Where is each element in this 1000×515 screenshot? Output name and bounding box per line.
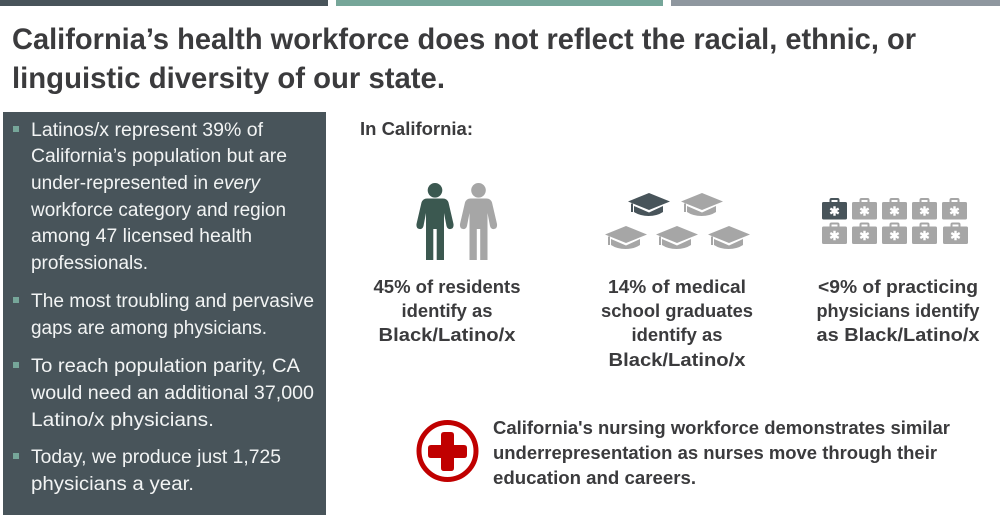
stat: medical school graduates: [601, 277, 753, 370]
bullet point: Latino representation: among 47 licensed health: [31, 226, 252, 247]
stat: practicing physicians: <9% of practicing: [818, 277, 978, 297]
bullet point: annual production: Today, we produce just 1,725: [31, 447, 281, 468]
bullet point: physician gaps: [13, 291, 314, 339]
callout: nursing workforce: [493, 418, 950, 488]
stat: residents: identify as: [402, 301, 492, 321]
bullet point: Latino representation: California’s population but are: [31, 146, 287, 167]
bullet point: Latino representation: professionals.: [31, 253, 148, 274]
stat: practicing physicians: [816, 277, 980, 345]
bullet point: population parity: would need an additional 37,000: [30, 383, 314, 404]
heading: In California: In California:: [360, 119, 473, 139]
stat: practicing physicians: physicians identify: [816, 301, 980, 321]
stat: residents: Black/Latino/x: [378, 325, 516, 345]
bullet point: physician gaps: gaps are among physicians.: [31, 318, 267, 339]
icon: medical bags: [822, 198, 968, 244]
bullet point: Latino representation: under-represented in every: [31, 173, 261, 194]
title: [12, 23, 916, 95]
icon: two people: [416, 183, 497, 260]
title: linguistic diversity of our state.: [12, 62, 445, 95]
stat: residents: [374, 277, 520, 345]
bullet point: population parity: Latino/x physicians.: [31, 410, 214, 431]
bullet point: annual production: [13, 447, 281, 495]
title: California’s health workforce does not reflect the racial, ethnic, or: [12, 23, 916, 56]
panel: key facts sidebar: [3, 112, 326, 515]
bullet point: annual production: physicians a year.: [31, 474, 194, 495]
stat: medical school graduates: 14% of medical: [608, 277, 746, 297]
bullet point: Latino representation: [13, 120, 287, 274]
icon: red cross: [419, 422, 476, 480]
bullet point: physician gaps: The most troubling and pervasive: [31, 291, 314, 312]
bullet point: population parity: [13, 356, 314, 431]
callout: nursing workforce: education and careers.: [493, 468, 696, 488]
stat: medical school graduates: identify as: [632, 325, 722, 345]
bullet point: population parity: To reach population parity, CA: [31, 356, 300, 377]
stat: residents: 45% of residents: [374, 277, 520, 297]
callout: nursing workforce: underrepresentation as nurses move through their: [493, 443, 937, 463]
stat: medical school graduates: Black/Latino/x: [608, 350, 746, 370]
callout: nursing workforce: California's nursing workforce demonstrates similar: [493, 418, 950, 438]
top colour bars: [0, 0, 1000, 6]
stat: practicing physicians: as Black/Latino/x: [816, 325, 980, 345]
bullet point: Latino representation: Latinos/x represent 39% of: [31, 120, 264, 141]
icon: graduation caps: [605, 193, 750, 249]
bullet point: Latino representation: workforce category and region: [30, 200, 286, 221]
stat: medical school graduates: school graduates: [601, 301, 753, 321]
